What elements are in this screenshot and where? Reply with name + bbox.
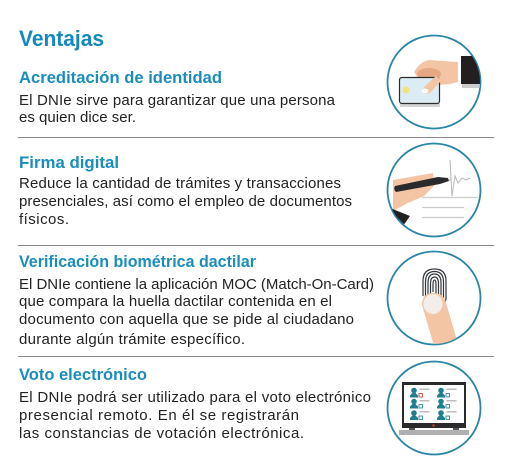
text block: que compara la huella dactilar contenida en el <box>19 293 332 310</box>
divider <box>18 356 494 357</box>
icon: pen signing <box>388 144 480 236</box>
panel: verificación biométrica dactilar <box>19 252 480 348</box>
heading: Voto electrónico <box>19 366 147 384</box>
divider <box>18 137 494 138</box>
heading: Acreditación de identidad <box>19 69 222 87</box>
panel: acreditación de identidad <box>19 36 486 128</box>
panel: voto electrónico <box>19 362 480 454</box>
text block: Reduce la cantidad de trámites y transacciones <box>19 175 341 192</box>
panel: firma digital <box>19 144 480 236</box>
text block <box>19 389 371 442</box>
title: Ventajas <box>19 26 104 51</box>
text block <box>19 175 352 228</box>
text block <box>19 276 374 348</box>
icon: laptop with ballot <box>388 362 480 454</box>
text block: físicos. <box>19 211 69 228</box>
divider <box>18 245 494 246</box>
text block: El DNIe podrá ser utilizado para el voto electrónico <box>19 389 371 406</box>
text block: es quien dice ser. <box>19 109 136 126</box>
text block: El DNIe sirve para garantizar que una persona <box>19 92 336 109</box>
text block: presenciales, así como el empleo de documentos <box>19 193 352 210</box>
heading: Firma digital <box>19 154 119 172</box>
text block: presencial remoto. En él se registrarán <box>19 407 299 424</box>
heading: Verificación biométrica dactilar <box>19 253 257 271</box>
text block: las constancias de votación electrónica. <box>19 425 304 442</box>
text block: documento con aquella que se pide al ciudadano <box>19 311 354 328</box>
text block: durante algún trámite específico. <box>19 331 245 348</box>
text block <box>19 92 336 126</box>
icon: hand and card <box>388 36 486 128</box>
icon: fingerprint <box>388 252 480 346</box>
text block: El DNIe contiene la aplicación MOC (Match-On-Card) <box>19 276 374 293</box>
